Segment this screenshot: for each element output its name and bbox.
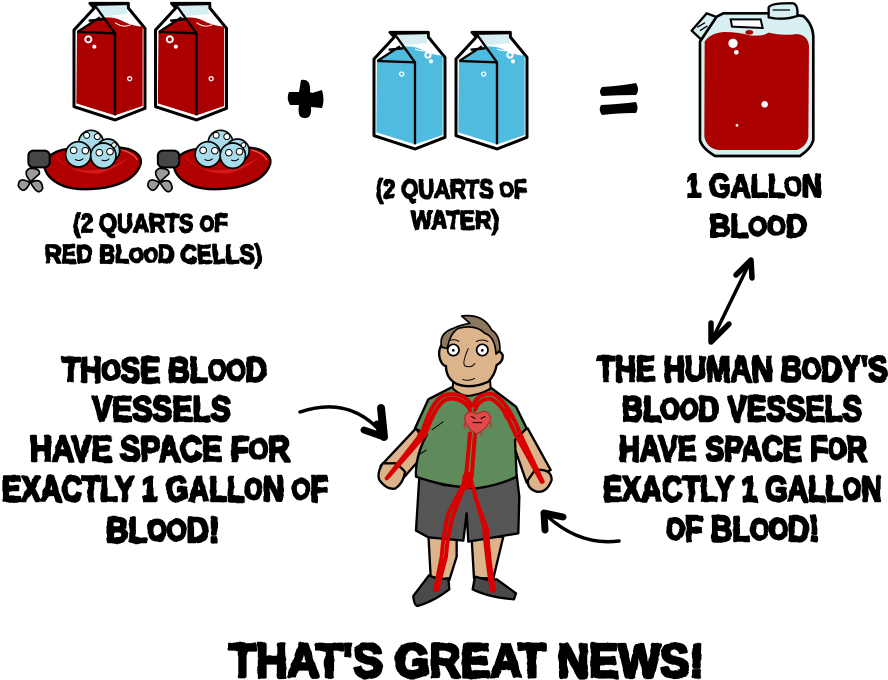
text: those blood vessels: VESSELS xyxy=(92,390,231,429)
label: 2 quarts of water: WATER) xyxy=(411,205,499,235)
shorts xyxy=(416,475,519,542)
icon: red carton 1 xyxy=(74,3,145,120)
figure: man with blood vessels xyxy=(379,316,552,606)
icon: red carton 2 xyxy=(155,3,226,120)
label: 2 quarts of red blood cells xyxy=(45,208,262,269)
icon: red blood cell with white cells 1 xyxy=(18,130,141,192)
text: those blood vessels: THOSE BLOOD xyxy=(62,351,267,390)
text: the human body's blood vessels: BLOOD VESSELS xyxy=(622,390,862,429)
hands xyxy=(379,463,552,492)
icon: blue carton 2 xyxy=(456,32,527,149)
icon: red blood cell with white cells 2 xyxy=(148,130,270,192)
arms xyxy=(381,428,551,483)
shirt xyxy=(415,387,527,488)
arrow: right curved arrow xyxy=(544,513,619,542)
arrow: left curved arrow xyxy=(300,407,384,437)
label: 1 gallon blood xyxy=(686,168,822,244)
shoes xyxy=(413,575,516,606)
label: 2 quarts of red blood cells: (2 QUARTS OF xyxy=(73,208,228,238)
text: the human body's blood vessels xyxy=(597,350,888,549)
heart xyxy=(464,411,491,437)
text: those blood vessels xyxy=(2,351,328,550)
label: 2 quarts of water: (2 QUARTS OF xyxy=(376,174,527,204)
arrow: double headed xyxy=(711,260,752,342)
icon: plus sign xyxy=(288,80,324,118)
label: 1 gallon blood: BLOOD xyxy=(709,208,807,244)
label: 2 quarts of water xyxy=(376,174,527,235)
text: those blood vessels: BLOOD! xyxy=(106,511,219,550)
hair xyxy=(441,316,500,354)
text: the human body's blood vessels: HAVE SPACE FOR xyxy=(619,430,867,469)
label: 2 quarts of red blood cells: RED BLOOD CELLS) xyxy=(45,239,262,269)
text: those blood vessels: EXACTLY 1 GALLON OF xyxy=(2,470,328,509)
legs xyxy=(428,533,503,580)
head xyxy=(439,325,503,386)
blood vessels xyxy=(387,394,543,591)
text: the human body's blood vessels: OF BLOOD! xyxy=(666,510,819,549)
icon: equals sign xyxy=(600,83,638,115)
face xyxy=(448,340,488,380)
icon: gallon jug of blood xyxy=(692,3,813,156)
icon: blue carton 1 xyxy=(374,32,445,149)
neck xyxy=(453,378,491,396)
text: those blood vessels: HAVE SPACE FOR xyxy=(30,430,290,469)
text: the human body's blood vessels: EXACTLY 1 GALLON xyxy=(603,470,882,509)
label: 1 gallon blood: 1 GALLON xyxy=(686,168,822,204)
